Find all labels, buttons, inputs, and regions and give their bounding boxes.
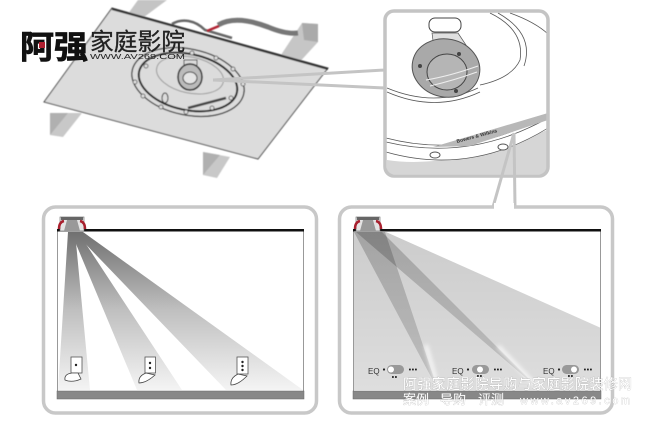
EQ switch 1 [368, 365, 417, 377]
watermark bottom: www.av269.com [519, 395, 630, 407]
gap for callout [494, 203, 514, 211]
watermark logo: 阿强 [20, 29, 88, 65]
ceiling line [353, 229, 601, 232]
cable and rear bracket [172, 20, 298, 38]
sound beam: wide [356, 232, 601, 390]
model label strip [433, 113, 548, 147]
speaker icon [59, 217, 85, 231]
room walls [354, 231, 600, 391]
room walls [58, 231, 304, 391]
mounting holes [430, 144, 508, 158]
remote dial in hand: two dots [139, 357, 156, 383]
speaker ring [125, 38, 251, 126]
EQ switch 3: EQ [543, 367, 555, 376]
model label strip: Bowers & Wilkins [456, 128, 498, 145]
illustration: ceiling plate with speaker mount [44, 0, 328, 178]
watermark logo: WWW.AV269.COM [90, 54, 185, 61]
sound beam: medium [71, 232, 182, 390]
floor [353, 391, 601, 399]
callout lines from label to right panel [493, 133, 515, 207]
joists behind the plate [50, 0, 318, 178]
watermark bottom: 导购 [440, 392, 466, 407]
watermark bottom: 评测 [478, 392, 504, 407]
ceiling plate [44, 8, 328, 159]
watermark bottom [403, 376, 632, 407]
floor [57, 391, 304, 399]
EQ switch 3 [543, 365, 592, 376]
sound beam: medium [354, 232, 540, 390]
bright streaks on floor [426, 345, 538, 388]
EQ switch 2: EQ [452, 367, 464, 376]
speaker icon [355, 217, 381, 231]
watermark bottom: 阿强家庭影院导购与家庭影院装修网 [403, 376, 632, 392]
sound beam: narrow [354, 232, 438, 390]
watermark logo [20, 29, 185, 65]
callout lines from speaker to detail panel [213, 70, 385, 88]
EQ switch 1: EQ [368, 367, 380, 376]
EQ switch 2 [452, 365, 502, 376]
sound beam: narrow [58, 232, 90, 390]
ceiling line [57, 229, 304, 232]
watermark bottom: 案例 [403, 392, 429, 407]
sound beam: wide [74, 232, 303, 390]
panel: right room, three EQ settings [340, 203, 612, 413]
remote dial in hand: three dots [231, 357, 248, 385]
panel: detail of tweeter dial [385, 11, 548, 176]
speaker rim arcs [386, 13, 548, 148]
panel: left room, three toe-in settings [44, 207, 316, 413]
watermark logo: 家庭影院 [90, 29, 185, 56]
tweeter dial [407, 18, 485, 103]
remote dial in hand: one dot [65, 357, 82, 381]
